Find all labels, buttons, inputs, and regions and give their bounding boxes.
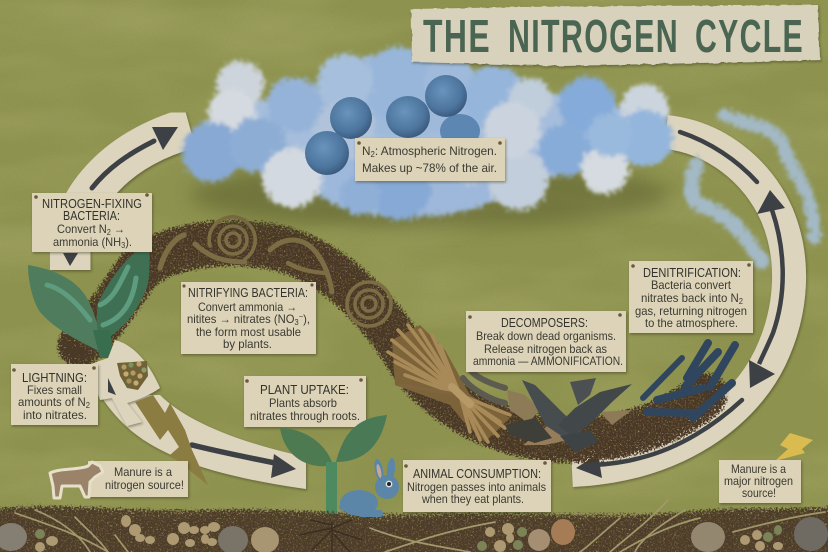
label: denitrification: Bacteria convert	[651, 278, 732, 292]
paper root pieces	[88, 340, 160, 426]
label: plant uptake: Plants absorb	[269, 396, 337, 410]
label: denitrification: to the atmosphere.	[645, 316, 738, 330]
label: animal consumption	[403, 460, 551, 512]
label: atmospheric nitrogen: N	[362, 144, 371, 158]
cloud: wool clumps	[182, 47, 673, 220]
label: plant uptake	[244, 376, 366, 427]
seeds: nitrogen nodules	[117, 361, 148, 390]
molecules: blue N2 balls	[305, 75, 480, 175]
plant: center sprout	[280, 415, 387, 522]
label: animal consumption: ANIMAL CONSUMPTION:	[413, 466, 541, 481]
label: lightning: into nitrates.	[23, 408, 87, 422]
label: denitrification: nitrates back into N	[641, 291, 744, 305]
label: denitrification: 2	[739, 297, 744, 306]
label: nitrogen-fixing bacteria: 2	[107, 228, 111, 237]
plant roots	[300, 520, 362, 552]
label: decomposers: DECOMPOSERS:	[501, 315, 588, 330]
label: major nitrogen source	[719, 460, 801, 503]
label: lightning: 2	[86, 401, 91, 410]
label: major nitrogen source: major nitrogen	[724, 474, 793, 488]
label: nitrifying bacteria: 3	[295, 318, 299, 327]
soil: spirals and worms	[160, 217, 391, 326]
icon: yellow lightning bolt	[775, 433, 813, 461]
label: denitrification: DENITRIFICATION:	[643, 265, 741, 280]
label: atmospheric nitrogen: Makes up ~78% of the air.	[362, 161, 497, 175]
label: nitrifying bacteria: by plants.	[223, 337, 272, 351]
title banner: THE	[423, 10, 491, 62]
dark decaying leaves	[505, 378, 632, 452]
label: nitrogen-fixing bacteria: BACTERIA:	[63, 208, 120, 223]
arrow band: top left	[63, 127, 190, 270]
icon: cow with manure note	[50, 461, 188, 498]
icon: cow with manure note: Manure is a	[114, 465, 172, 479]
label: nitrogen-fixing bacteria	[32, 193, 152, 252]
label: major nitrogen source: Manure is a	[731, 462, 786, 476]
label: nitrogen-fixing bacteria: NITROGEN-FIXING	[42, 196, 142, 211]
label: lightning: LIGHTNING:	[22, 370, 87, 385]
soil: curved path	[80, 243, 705, 440]
arrow band: lower left	[100, 395, 306, 489]
title banner: NITROGEN	[508, 10, 679, 62]
label: nitrifying bacteria: Convert ammonia →	[198, 300, 297, 314]
rabbit	[339, 458, 399, 517]
label: nitrogen-fixing bacteria: Convert N	[57, 222, 111, 236]
label: atmospheric nitrogen: 2	[370, 150, 375, 159]
label: denitrification: gas, returning nitrogen	[635, 304, 747, 318]
icon: brown lightning bolt	[135, 395, 208, 485]
bottom soil strip	[0, 506, 828, 552]
label: decomposers: ammonia — AMMONIFICATION.	[473, 354, 623, 368]
grey sticks	[463, 372, 505, 403]
label: denitrification	[629, 261, 753, 333]
label: nitrogen-fixing bacteria: →	[111, 222, 125, 236]
dark blue denitrifying bacteria	[643, 343, 735, 418]
label: animal consumption: when they eat plants.	[421, 492, 524, 506]
label: lightning: Fixes small	[27, 383, 82, 397]
label: nitrogen-fixing bacteria: 3	[121, 241, 126, 250]
label: decomposers	[466, 311, 626, 372]
label: nitrifying bacteria: nitites → nitrates (NO	[187, 312, 302, 326]
wisps: nitrogen gas returning	[691, 115, 815, 262]
label: atmospheric nitrogen: : Atmospheric Nitrogen.	[375, 144, 497, 158]
label: nitrogen-fixing bacteria: ammonia (NH	[53, 235, 127, 249]
label: atmospheric nitrogen	[355, 138, 505, 181]
title banner	[411, 5, 820, 66]
label: nitrifying bacteria: −	[299, 312, 303, 321]
label: nitrifying bacteria: NITRIFYING BACTERIA:	[188, 285, 308, 300]
stones and pebbles	[0, 515, 828, 552]
label: nitrogen-fixing bacteria: ).	[125, 235, 132, 249]
label: plant uptake: nitrates through roots.	[250, 409, 360, 423]
straw bundle	[388, 325, 510, 442]
label: major nitrogen source: source!	[742, 486, 776, 500]
label: lightning: amounts of N	[18, 395, 89, 409]
plant: left sprout with bacteria leaves	[28, 243, 150, 358]
label: nitrifying bacteria: the form most usable	[196, 325, 301, 339]
label: decomposers: Release nitrogen back as	[484, 342, 607, 356]
label: animal consumption: Nitrogen passes into animals	[407, 480, 546, 494]
cloud shadow	[190, 161, 670, 229]
arrow band: right side	[572, 132, 789, 478]
dried grass blades	[15, 500, 825, 552]
label: lightning	[11, 364, 98, 425]
icon: cow with manure note: nitrogen source!	[105, 478, 184, 492]
label: nitrifying bacteria	[181, 282, 316, 354]
label: nitrifying bacteria: ),	[303, 312, 310, 326]
label: decomposers: Break down dead organisms.	[476, 329, 616, 343]
label: plant uptake: PLANT UPTAKE:	[260, 382, 349, 397]
